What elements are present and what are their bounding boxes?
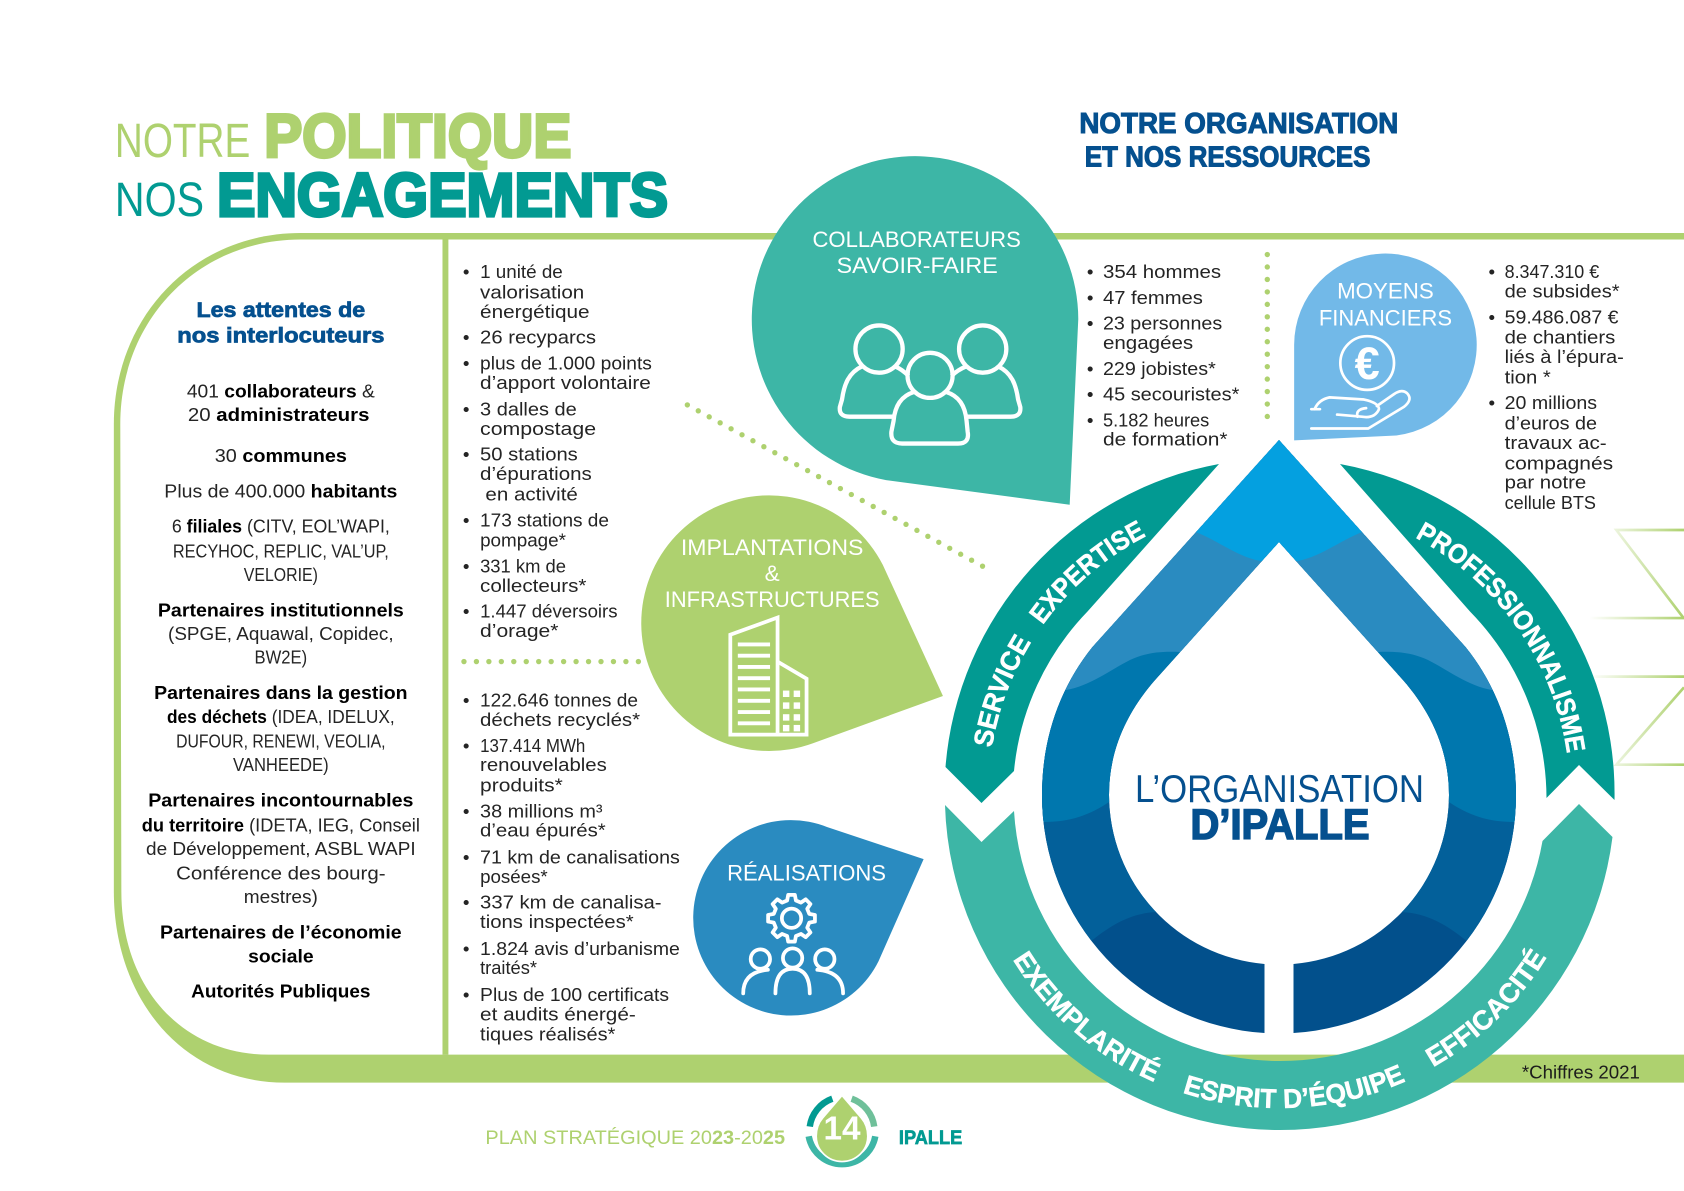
title: NOS <box>115 173 204 227</box>
text block: attentes des interlocuteurs: RECYHOC, REPLIC, VAL’UP, <box>173 540 389 561</box>
list: realisations figures: produits* <box>480 775 564 796</box>
bubble: implantations et infrastructures <box>641 495 943 751</box>
list: implantations figures: 26 recyparcs <box>480 327 596 348</box>
list: realisations figures: 337 km de canalisa- <box>480 892 662 913</box>
icon: gear <box>768 895 815 942</box>
bubble: moyens financiers: FINANCIERS <box>1319 305 1452 330</box>
list: moyens financiers figures: compagnés <box>1505 452 1613 473</box>
list: realisations figures: 137.414 MWh <box>480 735 585 756</box>
list: moyens financiers figures: de subsides* <box>1505 280 1620 301</box>
heading: notre organisation: ET NOS RESSOURCES <box>1085 141 1370 173</box>
list: realisations figures: • <box>463 690 469 711</box>
list: collaborateurs figures: • <box>1087 261 1093 282</box>
text block: attentes des interlocuteurs: sociale <box>248 945 314 966</box>
text block: attentes des interlocuteurs: VANHEEDE) <box>233 754 329 775</box>
list: moyens financiers figures: 8.347.310 € <box>1505 261 1600 282</box>
list: realisations figures: • <box>463 938 469 959</box>
bubble: implantations et infrastructures: & <box>765 561 780 586</box>
list: moyens financiers figures: • <box>1489 392 1495 413</box>
text block: attentes des interlocuteurs: Partenaires incontournables <box>148 790 413 811</box>
text block: attentes des interlocuteurs: Partenaires de l’économie <box>160 922 402 943</box>
diagram: ring of values <box>945 464 1615 1130</box>
title <box>115 102 668 229</box>
arc: exemplarite esprit d'equipe efficacite <box>945 804 1612 1130</box>
list: realisations figures: • <box>463 800 469 821</box>
list: realisations figures: Plus de 100 certificats <box>480 984 669 1005</box>
text block: attentes des interlocuteurs: Partenaires institutionnels <box>158 599 404 620</box>
list: realisations figures: 38 millions m³ <box>480 800 603 821</box>
list: collaborateurs figures: • <box>1087 384 1093 405</box>
icon: three people outline <box>743 948 843 993</box>
list: implantations figures: • <box>463 444 469 465</box>
list: implantations figures: plus de 1.000 points <box>480 352 652 373</box>
icon: three people <box>840 325 1020 444</box>
text block: attentes des interlocuteurs: DUFOUR, RENEWI, VEOLIA, <box>176 730 386 751</box>
list: realisations figures: traités* <box>480 957 538 978</box>
list: moyens financiers figures: tion * <box>1505 366 1552 387</box>
icon: building <box>730 618 807 735</box>
list: moyens financiers figures: liés à l’épura- <box>1505 346 1624 367</box>
list: implantations figures: • <box>463 509 469 530</box>
arc: service expertise <box>946 464 1219 803</box>
list: realisations figures: posées* <box>480 866 548 887</box>
heading: les attentes: nos interlocuteurs <box>177 324 385 348</box>
list: realisations figures: • <box>463 846 469 867</box>
text block: attentes des interlocuteurs: 401 collaborateurs & <box>187 380 375 401</box>
list: implantations figures: 50 stations <box>480 444 578 465</box>
arc: exemplarite esprit d'equipe efficacite: ESPRIT D’ÉQUIPE <box>1184 1064 1406 1108</box>
text block: attentes des interlocuteurs: VELORIE) <box>244 564 318 585</box>
list: collaborateurs figures: 23 personnes <box>1103 313 1222 334</box>
list: implantations figures: • <box>463 601 469 622</box>
bubble: collaborateurs: SAVOIR-FAIRE <box>837 253 998 278</box>
list: realisations figures: d’eau épurés* <box>480 820 606 841</box>
list: collaborateurs figures: de formation* <box>1103 429 1228 450</box>
bubble: realisations <box>693 820 924 1016</box>
arc: service expertise: EXPERTISE <box>1028 520 1146 624</box>
list: collaborateurs figures: 5.182 heures <box>1103 409 1209 430</box>
bubble: implantations et infrastructures: INFRASTRUCTURES <box>665 587 880 612</box>
list: implantations figures: 3 dalles de <box>480 399 577 420</box>
text block: attentes des interlocuteurs: (SPGE, Aquawal, Copidec, <box>168 623 394 644</box>
text block: attentes des interlocuteurs: Conférence des bourg- <box>176 863 386 884</box>
center title: l'organisation d'ipalle <box>1135 768 1424 849</box>
bubble: implantations et infrastructures: IMPLANTATIONS <box>681 535 863 560</box>
list: implantations figures: valorisation <box>480 282 584 303</box>
list: realisations figures: • <box>463 735 469 756</box>
bubble: collaborateurs: COLLABORATEURS <box>812 227 1021 252</box>
decorative chevrons: faint green lines at the right edge <box>1589 530 1684 765</box>
text block: attentes des interlocuteurs <box>142 298 420 1002</box>
list: realisations figures <box>463 690 680 1045</box>
center title: l'organisation d'ipalle: L’ORGANISATION <box>1135 768 1424 811</box>
arc: exemplarite esprit d'equipe efficacite: EXEMPLARITÉ <box>1013 950 1161 1082</box>
list: realisations figures: tiques réalisés* <box>480 1024 616 1045</box>
list: implantations figures: • <box>463 261 469 282</box>
list: implantations figures: collecteurs* <box>480 575 587 596</box>
bubble: realisations: RÉALISATIONS <box>727 861 886 886</box>
list: implantations figures: d’orage* <box>480 620 559 641</box>
bubble: moyens financiers: MOYENS <box>1337 279 1434 304</box>
icon: euro coin in hand <box>1311 336 1409 429</box>
panel frame: green rounded band <box>114 233 1684 1083</box>
title: POLITIQUE <box>264 102 571 170</box>
list: collaborateurs figures <box>1087 261 1240 450</box>
list: realisations figures: et audits énergé- <box>480 1003 636 1024</box>
list: implantations figures: en activité <box>485 483 578 504</box>
list: collaborateurs figures: • <box>1087 313 1093 334</box>
list: collaborateurs figures: engagées <box>1103 332 1193 353</box>
list: moyens financiers figures: travaux ac- <box>1505 432 1607 453</box>
arc: professionnalisme <box>1340 464 1615 800</box>
list: moyens financiers figures: de chantiers <box>1505 327 1615 348</box>
arc: exemplarite esprit d'equipe efficacite: EFFICACITÉ <box>1424 948 1546 1067</box>
list: implantations figures: 331 km de <box>480 555 566 576</box>
list: realisations figures: 122.646 tonnes de <box>480 690 638 711</box>
text block: attentes des interlocuteurs: du territoire (IDETA, IEG, Conseil <box>142 814 420 835</box>
text block: attentes des interlocuteurs: 20 administrateurs <box>188 404 369 425</box>
list: implantations figures: 173 stations de <box>480 509 609 530</box>
list: collaborateurs figures: 47 femmes <box>1103 287 1203 308</box>
list: realisations figures: tions inspectées* <box>480 911 634 932</box>
bubble: collaborateurs <box>752 156 1078 505</box>
list: moyens financiers figures: • <box>1489 261 1495 282</box>
list: realisations figures: • <box>463 984 469 1005</box>
footer: ipalle: IPALLE <box>899 1128 962 1149</box>
text block: attentes des interlocuteurs: mestres) <box>244 886 318 907</box>
diagram: blue water drop <box>1042 440 1516 1033</box>
footer: page number logo: 14 <box>823 1110 861 1147</box>
list: implantations figures: compostage <box>480 418 596 439</box>
list: collaborateurs figures: 229 jobistes* <box>1103 358 1216 379</box>
list: implantations figures: • <box>463 352 469 373</box>
icon: euro coin in hand: € <box>1355 338 1380 389</box>
list: collaborateurs figures: • <box>1087 358 1093 379</box>
heading: les attentes <box>177 298 385 348</box>
heading: notre organisation: NOTRE ORGANISATION <box>1079 108 1398 140</box>
list: realisations figures: 71 km de canalisations <box>480 846 680 867</box>
dotted connectors <box>464 255 1267 662</box>
footnote: chiffres 2021: *Chiffres 2021 <box>1522 1061 1640 1082</box>
heading: notre organisation <box>1079 108 1398 173</box>
arc: service expertise: SERVICE <box>974 634 1032 747</box>
list: moyens financiers figures: cellule BTS <box>1505 492 1596 513</box>
text block: attentes des interlocuteurs: Autorités Publiques <box>191 981 371 1002</box>
list: implantations figures: énergétique <box>480 301 590 322</box>
list: realisations figures: renouvelables <box>480 754 607 775</box>
list: moyens financiers figures: • <box>1489 306 1495 327</box>
list: collaborateurs figures: • <box>1087 409 1093 430</box>
list: implantations figures: • <box>463 399 469 420</box>
heading: les attentes: Les attentes de <box>197 298 365 322</box>
list: implantations figures: 1.447 déversoirs <box>480 601 618 622</box>
text block: attentes des interlocuteurs: 6 filiales (CITV, EOL’WAPI, <box>172 516 390 537</box>
text block: attentes des interlocuteurs: 30 communes <box>215 445 347 466</box>
list: moyens financiers figures <box>1489 261 1624 513</box>
list: implantations figures: pompage* <box>480 530 567 551</box>
center title: l'organisation d'ipalle: D’IPALLE <box>1190 801 1370 849</box>
list: moyens financiers figures: 20 millions <box>1505 392 1597 413</box>
list: moyens financiers figures: par notre <box>1505 472 1586 493</box>
list: collaborateurs figures: • <box>1087 287 1093 308</box>
text block: attentes des interlocuteurs: Plus de 400.000 habitants <box>164 480 397 501</box>
list: collaborateurs figures: 45 secouristes* <box>1103 384 1240 405</box>
list: implantations figures <box>463 261 652 641</box>
list: moyens financiers figures: 59.486.087 € <box>1505 306 1619 327</box>
title: ENGAGEMENTS <box>217 161 668 229</box>
arc: professionnalisme: PROFESSIONNALISME <box>1416 522 1586 753</box>
footer: page number logo <box>809 1095 875 1164</box>
list: implantations figures: 1 unité de <box>480 261 563 282</box>
footer: plan strategique: PLAN STRATÉGIQUE 20 23-2025 <box>485 1126 785 1149</box>
bubble: moyens financiers <box>1294 254 1477 440</box>
text block: attentes des interlocuteurs: Partenaires dans la gestion <box>154 682 408 703</box>
title: NOTRE <box>115 114 250 168</box>
list: realisations figures: 1.824 avis d’urbanisme <box>480 938 680 959</box>
list: implantations figures: d’épurations <box>480 463 592 484</box>
list: collaborateurs figures: 354 hommes <box>1103 261 1221 282</box>
list: realisations figures: • <box>463 892 469 913</box>
list: implantations figures: • <box>463 327 469 348</box>
list: implantations figures: • <box>463 555 469 576</box>
text block: attentes des interlocuteurs: BW2E) <box>255 647 307 668</box>
list: implantations figures: d’apport volontaire <box>480 372 651 393</box>
text block: attentes des interlocuteurs: de Développement, ASBL WAPI <box>146 838 416 859</box>
list: moyens financiers figures: d’euros de <box>1505 413 1597 434</box>
list: realisations figures: déchets recyclés* <box>480 709 641 730</box>
text block: attentes des interlocuteurs: des déchets (IDEA, IDELUX, <box>167 706 395 727</box>
